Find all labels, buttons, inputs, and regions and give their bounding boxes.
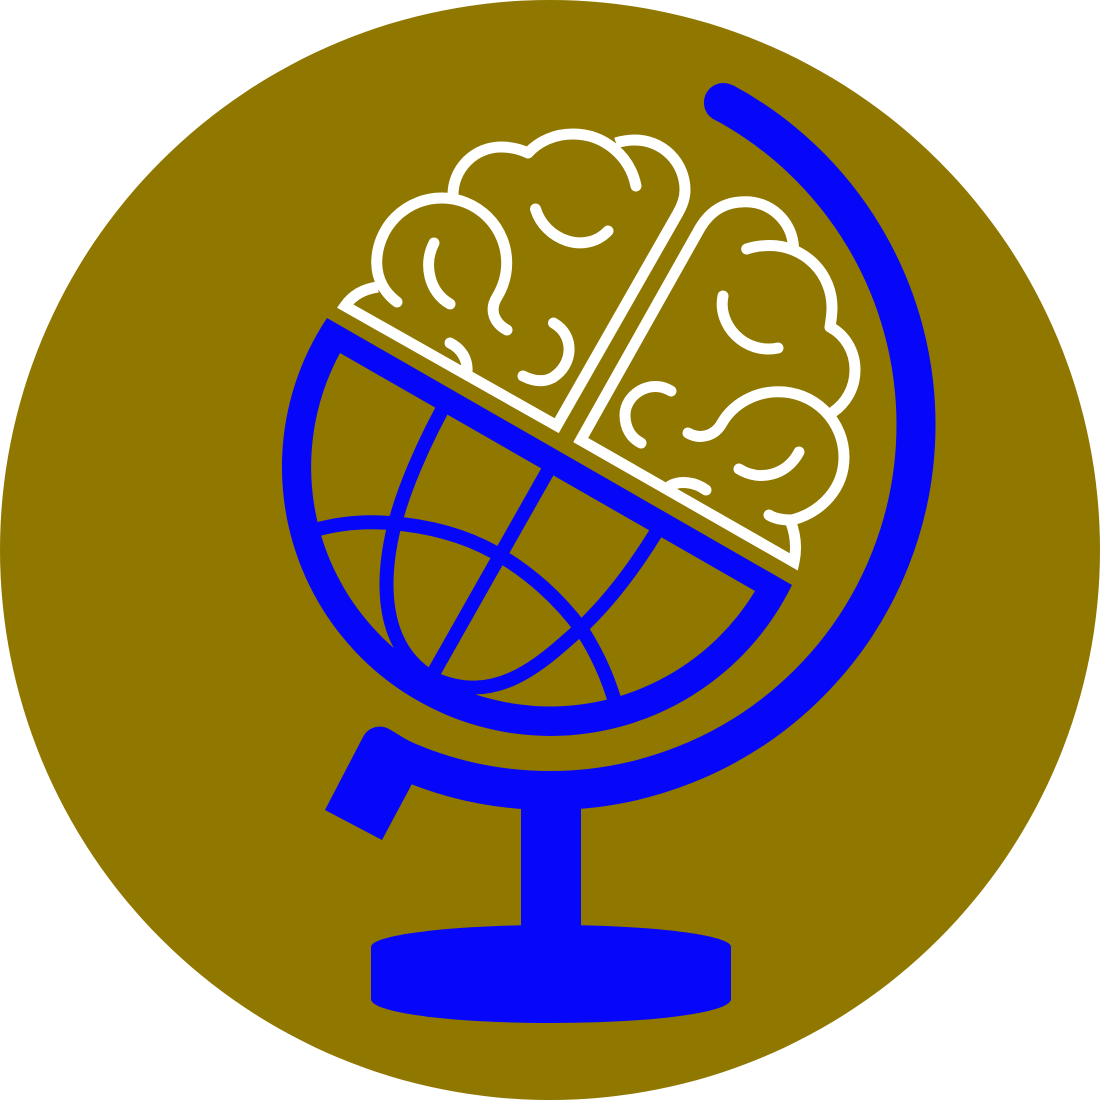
left brain hemisphere (345, 134, 685, 426)
right brain hemisphere (581, 202, 855, 562)
stand base (371, 925, 731, 1023)
arm top cap (704, 83, 743, 122)
stand stem (521, 790, 581, 940)
stand arm (400, 102, 916, 790)
arm foot (325, 727, 415, 840)
globe grid lines (315, 392, 667, 702)
globe rim (282, 318, 792, 736)
lower globe hemisphere (282, 318, 792, 736)
right hemisphere outline (581, 202, 796, 562)
left hemisphere outline (345, 140, 685, 426)
brain (345, 134, 855, 562)
right hemisphere folds (670, 483, 706, 490)
globe stand (325, 83, 916, 1023)
left hemisphere folds (450, 343, 467, 372)
right hemisphere lobes (747, 246, 855, 412)
left hemisphere lobes (453, 134, 636, 195)
